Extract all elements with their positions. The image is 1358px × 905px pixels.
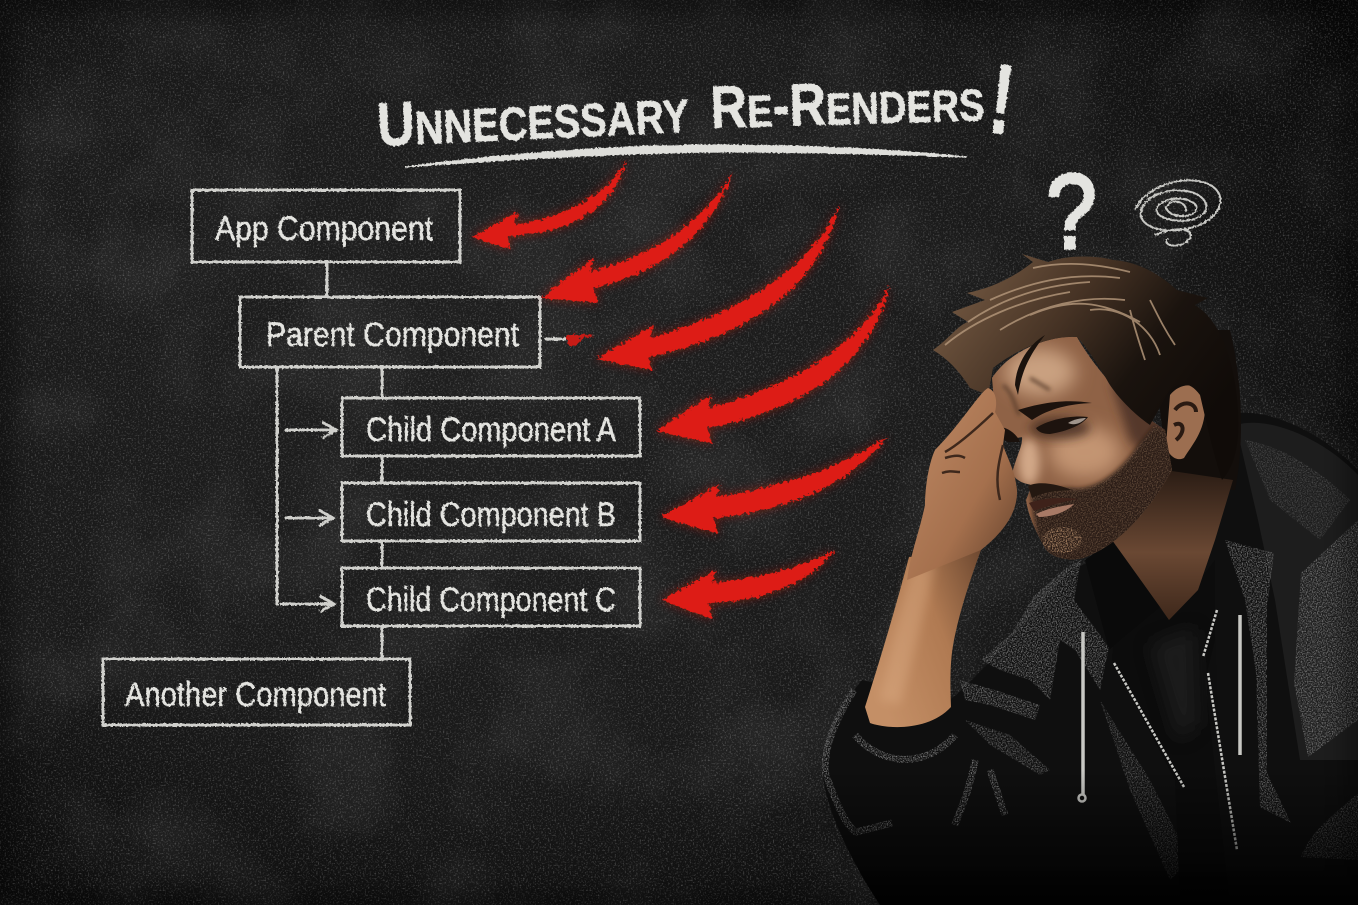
box: Another Component xyxy=(103,659,410,725)
nostril and moustache xyxy=(1028,483,1072,498)
hand on head xyxy=(907,388,1017,580)
box: Parent Component xyxy=(240,297,540,367)
eye far xyxy=(995,427,1020,442)
eyebrow xyxy=(1018,401,1092,420)
title word: Unnecessary: UNNECESSARY xyxy=(376,77,690,160)
hair strands xyxy=(945,264,1175,360)
scribble xyxy=(1135,180,1221,246)
forelock xyxy=(1015,335,1045,395)
lower lip xyxy=(1036,504,1074,517)
small red mark xyxy=(566,334,595,346)
label: Child Component A: Child Component A xyxy=(366,411,616,449)
title xyxy=(376,43,1021,160)
t-shirt xyxy=(1112,560,1230,905)
neck xyxy=(1112,470,1233,620)
eye white xyxy=(1068,418,1086,424)
forehead highlight xyxy=(1004,348,1076,396)
hood collar left xyxy=(1085,540,1160,650)
dashed link to parent xyxy=(545,338,566,340)
box: Child Component A xyxy=(342,398,640,456)
finger lines xyxy=(942,413,1003,500)
hair xyxy=(933,254,1238,480)
component tree xyxy=(103,190,640,725)
hoodie chalk highlights xyxy=(960,440,1358,880)
hoodie shoulder shade xyxy=(1236,423,1358,760)
red arrows xyxy=(472,160,890,619)
cheek highlight xyxy=(1049,426,1121,478)
back of head xyxy=(1150,330,1241,490)
component labels xyxy=(125,210,616,714)
label: Another Component: Another Component xyxy=(125,676,386,714)
label: Parent Component: Parent Component xyxy=(266,316,519,354)
label: Child Component C: Child Component C xyxy=(366,581,616,619)
label: App Component: App Component xyxy=(215,210,433,248)
chin stubble xyxy=(1042,527,1082,553)
face xyxy=(992,337,1172,560)
title exclamation mark: ! xyxy=(983,43,1021,157)
box: Child Component B xyxy=(342,483,640,541)
sleeve cuff chalk lines xyxy=(825,690,1005,832)
title word: Re-Renders: RE-RENDERS xyxy=(709,66,985,141)
forearm highlight xyxy=(880,565,935,705)
ear xyxy=(1166,385,1205,459)
inner ear xyxy=(1174,403,1196,440)
drawstrings and zippers xyxy=(1078,610,1240,850)
hoodie body xyxy=(823,413,1358,905)
brow furrows xyxy=(1003,378,1050,415)
connectors xyxy=(277,262,382,659)
forearm xyxy=(865,550,981,727)
branch arrows xyxy=(280,422,336,612)
t-shirt highlight xyxy=(1150,628,1198,740)
eye socket near xyxy=(1036,417,1088,434)
eye socket shade xyxy=(1030,417,1090,439)
worried man xyxy=(820,254,1358,905)
box: Child Component C xyxy=(342,568,640,626)
box: App Component xyxy=(192,190,460,262)
question mark: ? xyxy=(1046,153,1097,271)
title underline xyxy=(405,145,967,167)
bottom darkening xyxy=(820,770,1358,905)
nose highlight xyxy=(1018,438,1040,486)
temple shade xyxy=(1108,384,1169,452)
upper lip and mouth xyxy=(1029,498,1078,511)
beard xyxy=(1030,425,1180,570)
label: Child Component B: Child Component B xyxy=(366,496,616,534)
stubble xyxy=(1031,426,1172,560)
